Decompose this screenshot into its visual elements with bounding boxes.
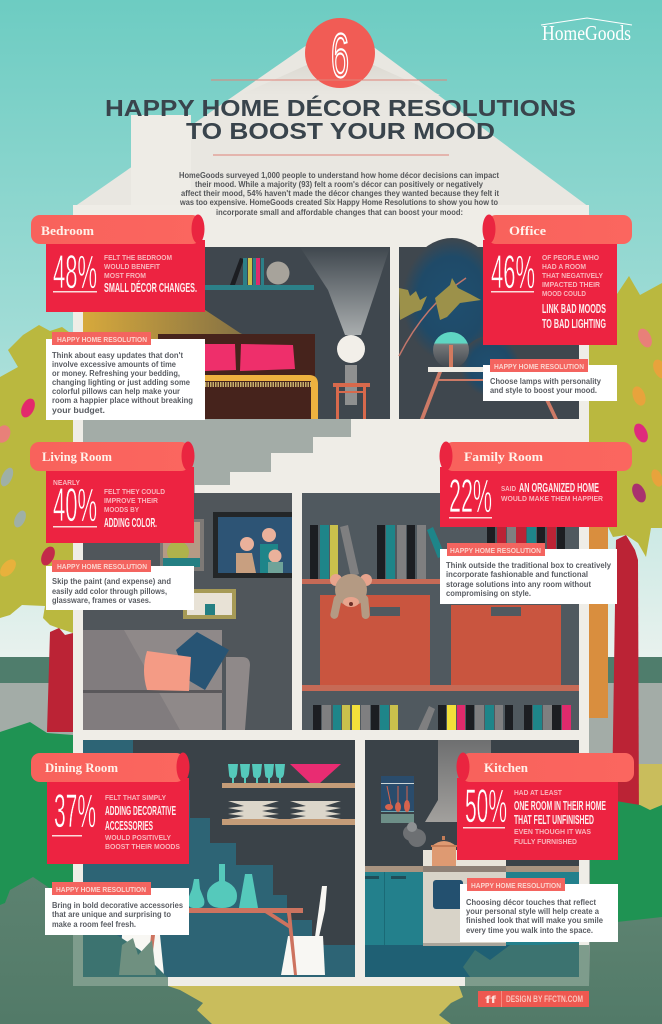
bedroom resolution card: HAPPY HOME RESOLUTION xyxy=(57,335,147,344)
books xyxy=(230,258,264,285)
staircase xyxy=(83,419,351,493)
stove xyxy=(423,850,506,946)
chair left xyxy=(119,935,164,975)
circle with number 6: 6 xyxy=(331,22,349,91)
bedroom resolution card: or money. Refreshing your bedding, xyxy=(52,369,180,378)
intro text: was too expensive. HomeGoods created Six Happy Home Resolutions to show you how to xyxy=(179,198,498,207)
living room stat: FELT THEY COULD xyxy=(104,487,166,496)
office stat: LINK BAD MOODS xyxy=(542,301,606,316)
gold light xyxy=(83,300,265,419)
desk xyxy=(420,367,558,419)
kitchen xyxy=(365,740,579,977)
bedroom resolution card: room a happier place without breaking xyxy=(52,396,193,405)
office ribbon: Office xyxy=(509,223,546,238)
family room xyxy=(302,493,579,730)
family room resolution card: Think outside the traditional box to creatively xyxy=(446,561,612,570)
plates xyxy=(228,801,341,819)
vases xyxy=(188,864,258,908)
intro text: affect their mood, 54% haven't made the décor changes they wanted because they felt it xyxy=(181,189,499,198)
panel: kitchen xyxy=(456,752,634,942)
kitchen resolution card: finished look that will make you smile xyxy=(466,916,604,925)
panel: dining room xyxy=(31,752,190,935)
panel: office xyxy=(482,214,632,401)
family room resolution card: HAPPY HOME RESOLUTION xyxy=(450,546,541,555)
blue glow xyxy=(402,238,502,362)
dining room stat: 37% xyxy=(54,784,96,837)
chimney xyxy=(131,115,191,215)
family room stat: AN ORGANIZED HOME xyxy=(519,480,599,495)
kitchen stat: FULLY FURNISHED xyxy=(514,837,578,846)
panel: family room xyxy=(440,442,632,604)
title: TO BOOST YOUR MOOD xyxy=(186,118,495,144)
kitchen resolution card xyxy=(460,878,618,942)
house right wall through bush xyxy=(579,945,589,986)
kitchen resolution card: Choosing décor touches that reflect xyxy=(466,898,596,907)
footer credit xyxy=(478,991,589,1007)
family room stat box xyxy=(440,467,617,527)
house left wall through bush xyxy=(73,905,83,977)
storage boxes xyxy=(320,595,561,685)
kitchen stat: HAD AT LEAST xyxy=(514,788,562,797)
living room stat: 40% xyxy=(53,478,97,531)
living room stat: MOODS BY xyxy=(104,505,139,514)
family room stat: 22% xyxy=(449,469,492,522)
living room ribbon xyxy=(30,442,194,471)
family room ribbon xyxy=(440,442,632,471)
left tree trunk xyxy=(47,628,73,732)
kitchen stat: THAT FELT UNFINISHED xyxy=(514,812,594,827)
living room resolution card: glassware, frames or vases. xyxy=(52,596,151,605)
chair right xyxy=(281,886,327,975)
desk lamp xyxy=(433,332,469,368)
dining room resolution card: Bring in bold decorative accessories xyxy=(52,901,184,910)
background: sky xyxy=(0,0,662,660)
footer credit: ff xyxy=(485,995,497,1006)
pink bowl xyxy=(290,764,341,783)
dining room resolution card: HAPPY HOME RESOLUTION xyxy=(56,885,146,894)
roof inner shade xyxy=(240,50,440,95)
bedroom stat xyxy=(53,245,197,298)
green bushes xyxy=(0,722,662,1024)
house base xyxy=(73,977,589,986)
family room stat: SAID xyxy=(501,484,516,493)
office stat: IMPACTED THEIR xyxy=(542,280,601,289)
living room stat: NEARLY xyxy=(53,478,80,487)
living room stat: IMPROVE THEIR xyxy=(104,496,159,505)
panel: living room xyxy=(30,442,194,610)
dining room xyxy=(83,740,355,977)
headboard and bed xyxy=(158,334,318,420)
family room resolution card: compromising on style. xyxy=(446,589,531,598)
house wall xyxy=(73,205,589,986)
office resolution card: and style to boost your mood. xyxy=(490,386,597,395)
title: HAPPY HOME DÉCOR RESOLUTIONS xyxy=(105,94,576,121)
bedroom stat: FELT THE BEDROOM xyxy=(104,253,172,262)
living room resolution card xyxy=(46,560,194,610)
kitchen stat box xyxy=(457,778,618,860)
sofa xyxy=(83,630,250,730)
gold picture xyxy=(183,589,236,619)
globe lamp xyxy=(333,335,370,419)
plant xyxy=(399,278,481,356)
bottom right bush xyxy=(439,917,662,1024)
dining room stat: ADDING DECORATIVE xyxy=(105,803,176,818)
living room resolution card: HAPPY HOME RESOLUTION xyxy=(57,562,147,571)
right tree xyxy=(589,276,662,830)
dining room stat: BOOST THEIR MOODS xyxy=(105,842,180,851)
roof xyxy=(74,22,589,245)
bedroom ribbon: Bedroom xyxy=(41,223,94,238)
kitchen ribbon xyxy=(456,752,634,782)
bedroom resolution card: changing lighting or just adding some xyxy=(52,378,191,387)
salmon pillow xyxy=(144,651,191,691)
house xyxy=(73,22,589,986)
cabinets xyxy=(365,872,579,945)
dining room stat: ACCESSORIES xyxy=(105,818,153,833)
utensil board xyxy=(381,776,414,823)
panel: bedroom xyxy=(31,214,205,420)
bedroom resolution card xyxy=(46,332,205,420)
family room stat: WOULD MAKE THEM HAPPIER xyxy=(501,494,604,503)
bedroom stat: 48% xyxy=(53,245,97,298)
bedroom resolution card: Think about easy updates that don't xyxy=(52,351,183,360)
bedroom stat: SMALL DÉCOR CHANGES. xyxy=(104,280,197,295)
lower shelf xyxy=(222,819,355,825)
left tree xyxy=(0,325,73,732)
dining room resolution card: that are unique and surprising to xyxy=(52,910,171,919)
kitchen stat: EVEN THOUGH IT WAS xyxy=(514,827,591,836)
family room ribbon: Family Room xyxy=(464,449,543,464)
intro text: incorporate small and affordable changes that can boost your mood: xyxy=(216,208,463,217)
background: ground xyxy=(0,657,662,1024)
office stat: OF PEOPLE WHO xyxy=(542,253,599,262)
footer credit: DESIGN BY FFCTN.COM xyxy=(506,994,583,1004)
office stat: 46% xyxy=(491,245,535,298)
dining room stat box xyxy=(47,778,189,864)
intro text xyxy=(179,171,499,217)
dining room ribbon xyxy=(31,752,190,782)
kitchen resolution card: every time you walk into the space. xyxy=(466,926,593,935)
circle with number 6 xyxy=(305,18,375,91)
navy pillow xyxy=(176,632,229,690)
shelf xyxy=(205,285,314,290)
bedroom room xyxy=(83,247,390,420)
title xyxy=(105,80,576,156)
bedroom resolution card: involve excessive amounts of time xyxy=(52,360,177,369)
teal stairs silhouette xyxy=(83,740,355,977)
office ribbon xyxy=(482,214,632,244)
large family portrait xyxy=(213,512,292,578)
clock xyxy=(266,262,290,284)
kitchen stat xyxy=(463,779,606,846)
floor xyxy=(365,945,579,977)
dining room stat: WOULD POSITIVELY xyxy=(105,833,171,842)
bush tint over dining room xyxy=(83,905,167,977)
family room stat xyxy=(449,469,604,522)
office resolution card: HAPPY HOME RESOLUTION xyxy=(494,362,584,371)
office stat box xyxy=(483,240,617,345)
office stat xyxy=(491,245,606,331)
intro text: their mood. While a majority (93) felt a room's décor can positively or negatively xyxy=(195,180,484,189)
bedroom resolution card: colorful pillows can help make your xyxy=(52,387,180,396)
living room xyxy=(83,493,292,730)
office stat: HAD A ROOM xyxy=(542,262,586,271)
kitchen resolution card: HAPPY HOME RESOLUTION xyxy=(471,881,561,890)
intro text: HomeGoods surveyed 1,000 people to understand how home décor decisions can impact xyxy=(179,171,499,180)
office resolution card xyxy=(483,359,617,401)
ground overlays xyxy=(73,905,662,1024)
orange drainpipe xyxy=(589,520,608,718)
office stat: THAT NEGATIVELY xyxy=(542,271,603,280)
wine glasses xyxy=(228,764,285,783)
counter xyxy=(365,866,579,872)
office room xyxy=(399,238,579,419)
logo: HomeGoods: HomeGoods xyxy=(542,21,631,45)
upper shelf xyxy=(302,579,579,584)
bedroom stat: WOULD BENEFIT xyxy=(104,262,160,271)
right tree trunk xyxy=(612,535,639,830)
family room resolution card: storage solutions into any room without xyxy=(446,580,591,589)
foreground spike over chair xyxy=(119,938,156,975)
teddy bear xyxy=(330,574,372,620)
dining room resolution card: make a room feel fresh. xyxy=(52,920,136,929)
office stat: MOOD COULD xyxy=(542,289,586,298)
kitchen ribbon: Kitchen xyxy=(484,760,529,775)
living room resolution card: easily add color through pillows, xyxy=(52,587,167,596)
upper books xyxy=(310,525,565,579)
lower books xyxy=(313,705,571,730)
steam xyxy=(403,822,426,847)
family room resolution card: incorporate fashionable and functional xyxy=(446,570,588,579)
top shelf xyxy=(222,783,355,788)
bedroom resolution card: your budget. xyxy=(52,406,105,415)
living room stat: ADDING COLOR. xyxy=(104,515,157,530)
pot xyxy=(431,836,457,866)
family room resolution card xyxy=(440,543,617,604)
living room stat box xyxy=(46,467,194,543)
bedroom ribbon xyxy=(31,214,204,244)
kitchen resolution card: your personal style will help create a xyxy=(466,907,600,916)
bedroom stat box xyxy=(46,240,205,312)
kitchen stat: 50% xyxy=(465,779,507,832)
bush tint over kitchen xyxy=(463,943,579,977)
living room resolution card: Skip the paint (and expense) and xyxy=(52,577,171,586)
office stat: TO BAD LIGHTING xyxy=(542,316,606,331)
living room ribbon: Living Room xyxy=(42,449,112,464)
office resolution card: Choose lamps with personality xyxy=(490,377,602,386)
dining table xyxy=(147,908,303,975)
dining room resolution card xyxy=(45,882,189,935)
lower shelf xyxy=(302,685,579,691)
bedroom stat: MOST FROM xyxy=(104,271,146,280)
spotlight cone xyxy=(300,247,390,335)
dining room stat xyxy=(52,784,180,851)
small picture xyxy=(160,519,204,571)
dining room ribbon: Dining Room xyxy=(45,760,118,775)
dining room stat: FELT THAT SIMPLY xyxy=(105,793,166,802)
range hood xyxy=(425,740,491,822)
